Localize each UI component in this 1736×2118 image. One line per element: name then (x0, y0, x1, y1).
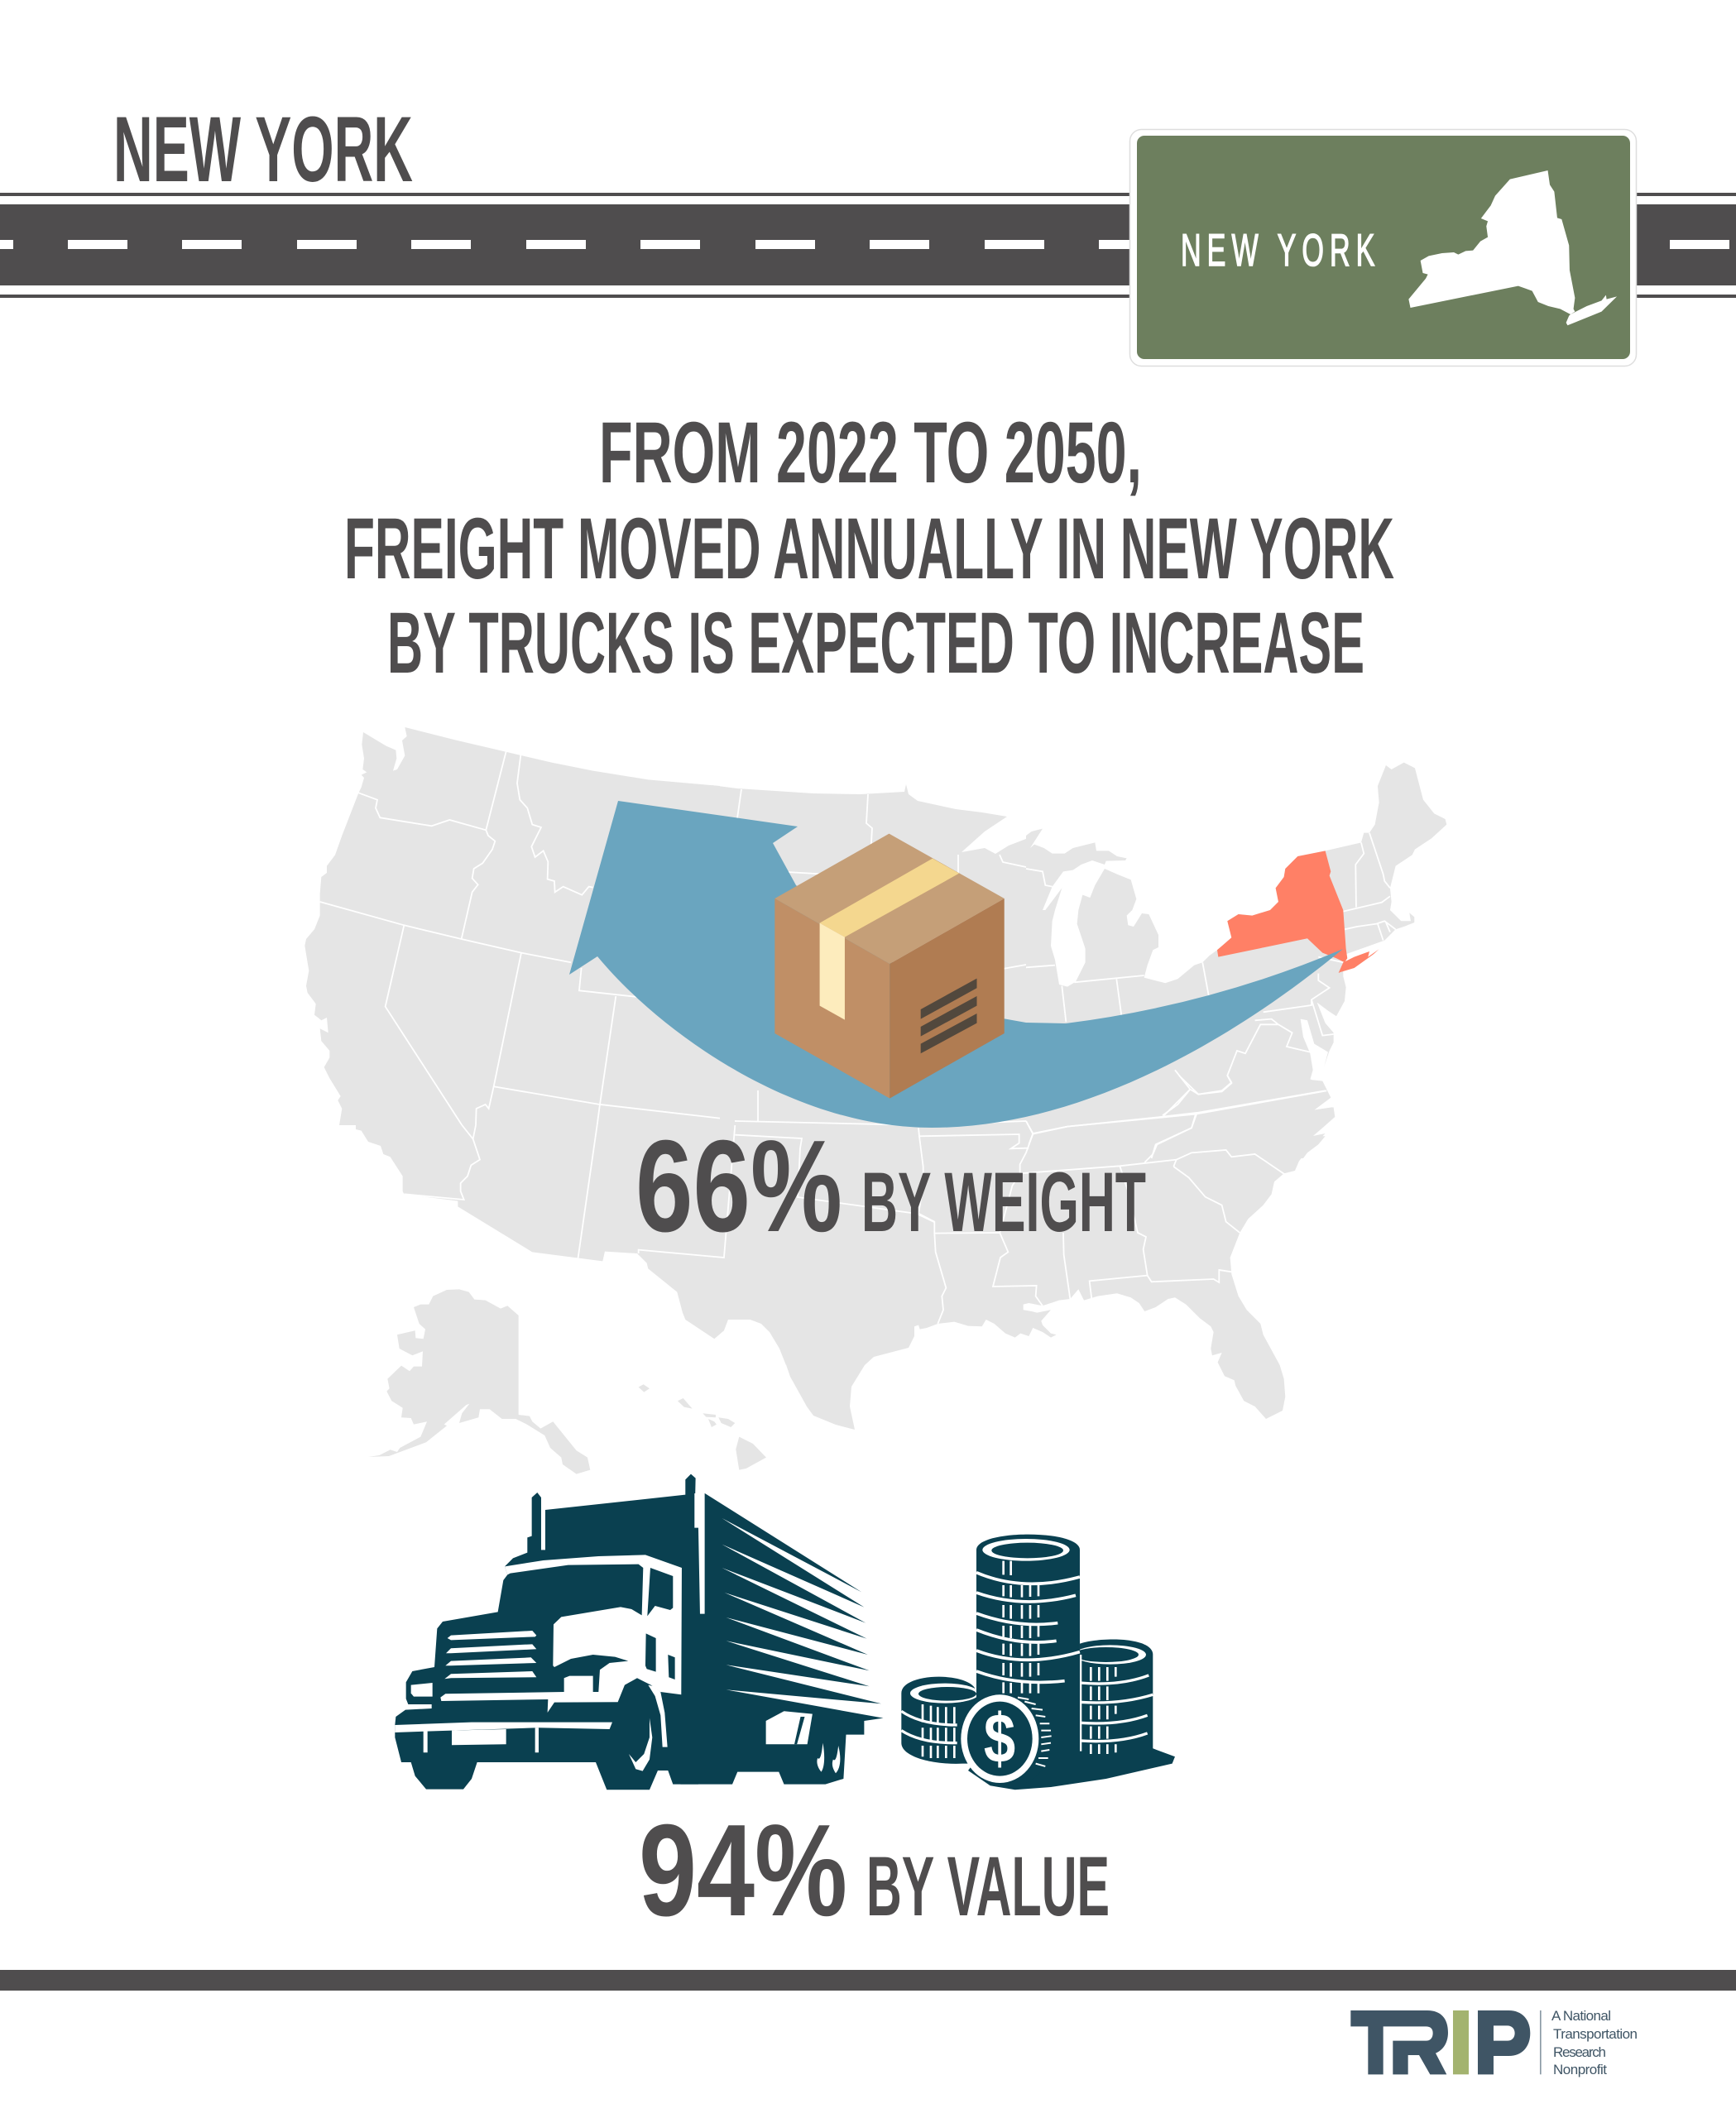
state borders (320, 751, 1396, 1324)
right stack (1073, 1639, 1153, 1754)
shadow (968, 1735, 1175, 1790)
US map (305, 727, 1446, 1474)
logo tagline: Research (1553, 2044, 1606, 2060)
road band (0, 193, 1736, 298)
logo: TRIP (1350, 2008, 1638, 2077)
logo tagline: Nonprofit (1553, 2062, 1607, 2077)
icon: truck (395, 1474, 883, 1790)
dollar coin (961, 1694, 1053, 1787)
stat: 94% by value: 94% (639, 1798, 847, 1943)
New York highlighted (1217, 851, 1379, 973)
stat: 94% by value (639, 1798, 1110, 1943)
stat: 66% by weight: 66% (635, 1114, 842, 1259)
trailer (680, 1493, 884, 1785)
logo tagline: A National (1551, 2008, 1611, 2024)
heading: FROM 2022 TO 2050, (599, 405, 1142, 501)
icon: cardboard box (774, 834, 1005, 1099)
contiguous states (305, 727, 1446, 1430)
heading (344, 405, 1394, 692)
dollar sign: $ (984, 1700, 1015, 1778)
title: New York: NEW YORK (113, 98, 413, 201)
arrow (569, 801, 1343, 1128)
footer bar (0, 1970, 1736, 1991)
cab (395, 1474, 705, 1790)
Hawaii (639, 1384, 766, 1470)
highway sign: New York (1130, 129, 1637, 366)
logo tagline: Transportation (1553, 2026, 1638, 2042)
icon: New York state silhouette (1408, 170, 1617, 325)
sign label: NEW YORK (1181, 225, 1374, 276)
icon: coin stacks (901, 1535, 1175, 1790)
logo tagline (1551, 2008, 1638, 2077)
stat: 66% by weight: BY WEIGHT (861, 1155, 1146, 1249)
stat: 66% by weight (635, 1114, 1146, 1259)
Alaska (368, 1289, 590, 1474)
centre stack (976, 1535, 1080, 1762)
stat: 94% by value: BY VALUE (866, 1839, 1110, 1934)
left stack (901, 1677, 979, 1764)
